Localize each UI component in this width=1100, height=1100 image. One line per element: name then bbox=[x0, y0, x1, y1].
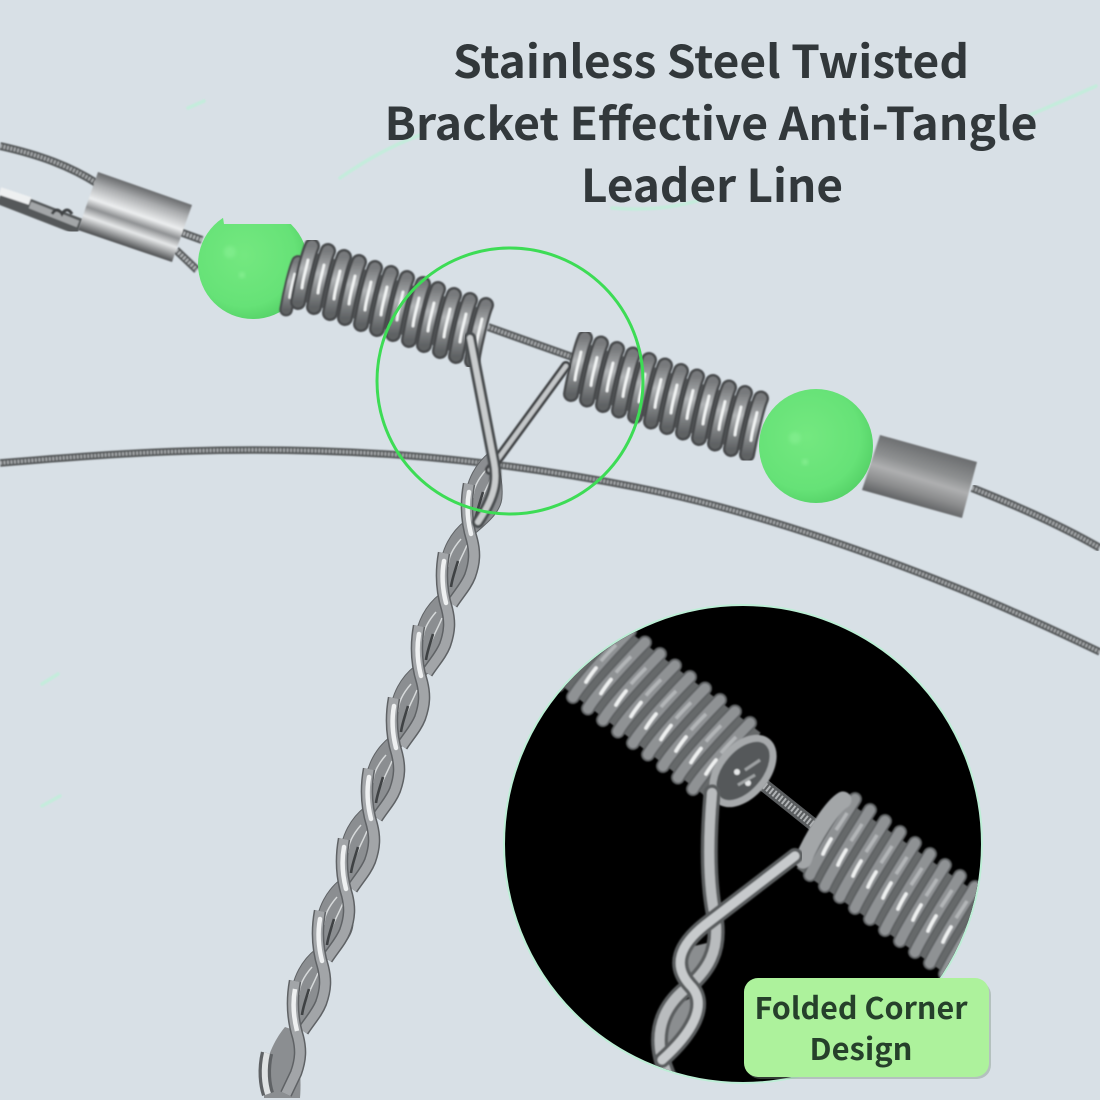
right green bead bbox=[759, 389, 873, 503]
left green bead bbox=[198, 218, 304, 319]
folded bracket legs bbox=[470, 338, 566, 522]
wire through the coils bbox=[176, 232, 575, 358]
title: Leader Line bbox=[581, 150, 843, 215]
inset lower coil bbox=[796, 790, 978, 978]
inset upper coil bbox=[559, 631, 778, 808]
wire right end bbox=[972, 488, 1100, 548]
green highlight circle bbox=[377, 248, 643, 514]
decorative green streaks bbox=[42, 86, 1096, 806]
title bbox=[384, 26, 1038, 215]
inset detail circle bbox=[504, 605, 1020, 1083]
upper wire left end bbox=[0, 146, 98, 227]
left crimp sleeve bbox=[78, 172, 192, 262]
inset connecting wire bbox=[755, 778, 815, 826]
title: Stainless Steel Twisted bbox=[453, 26, 969, 91]
callout: folded corner design: Design bbox=[810, 1025, 912, 1069]
inset twisted wire bbox=[655, 793, 795, 1076]
long curved fishing line bbox=[0, 450, 1100, 652]
right crimp sleeve bbox=[862, 435, 977, 518]
callout: folded corner design bbox=[744, 978, 991, 1079]
left spring coil bbox=[286, 246, 486, 361]
callout: folded corner design: Folded Corner bbox=[754, 984, 968, 1028]
twisted wire bbox=[264, 452, 502, 1098]
title: Bracket Effective Anti-Tangle bbox=[384, 88, 1038, 153]
right spring coil bbox=[571, 338, 761, 454]
